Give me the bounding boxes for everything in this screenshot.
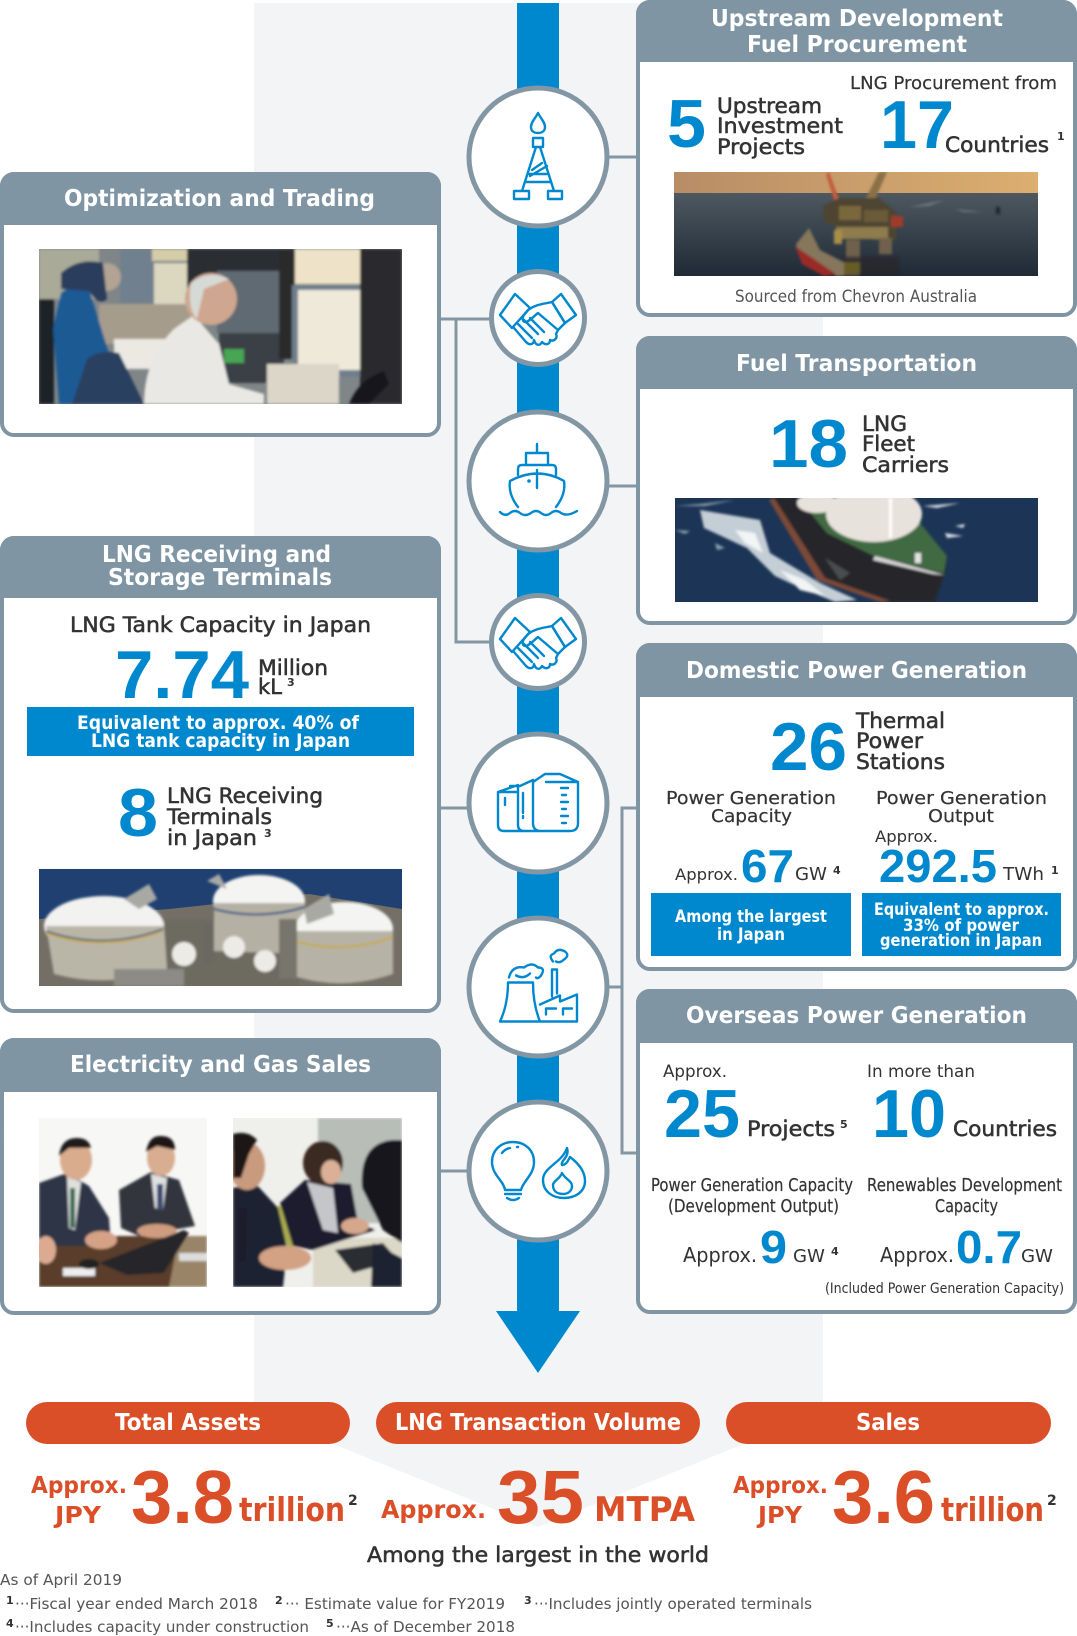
callout: 33 percent: Equivalent to approx. bbox=[874, 900, 1049, 920]
stat: capacity 9 GW: Power Generation Capacity bbox=[651, 1175, 853, 1196]
stat: capacity 67 GW bbox=[666, 788, 841, 892]
footnotes: ···As of December 2018 bbox=[336, 1618, 515, 1636]
footnotes: ···Includes capacity under construction bbox=[15, 1618, 309, 1636]
callout: 40 percent: LNG tank capacity in Japan bbox=[91, 730, 350, 752]
stat: 17 countries: LNG Procurement from bbox=[850, 73, 1057, 94]
stat: capacity 67 GW: GW bbox=[795, 864, 827, 885]
KPI: total assets: JPY bbox=[53, 1503, 101, 1529]
stat: output 292.5 TWh: TWh bbox=[1002, 864, 1044, 885]
photo: meeting with laptop bbox=[233, 1118, 402, 1287]
panel: overseas power generation bbox=[636, 989, 1077, 1312]
heading: fuel transportation: Fuel Transportation bbox=[736, 351, 977, 377]
footnotes: 4 bbox=[6, 1617, 14, 1630]
stat: capacity 9 GW: 4 bbox=[831, 1245, 839, 1258]
KPI: LNG transaction volume bbox=[376, 1402, 700, 1539]
footnotes: 2 bbox=[275, 1594, 283, 1607]
icon: handshake trading bbox=[492, 272, 584, 364]
footnotes: As of April 2019 bbox=[0, 1571, 122, 1589]
KPI: total assets: 2 bbox=[348, 1493, 358, 1509]
stat: capacity 67 GW: Approx. bbox=[675, 865, 738, 884]
stat: 25 projects: Approx. bbox=[663, 1062, 727, 1082]
KPI: LNG transaction volume: Approx. bbox=[381, 1495, 486, 1524]
KPI: total assets: trillion bbox=[239, 1490, 345, 1529]
heading: upstream: Fuel Procurement bbox=[747, 32, 967, 58]
stat: 26 thermal power stations: Thermal bbox=[855, 709, 945, 733]
callout: 40 percent: Equivalent to approx. 40% of bbox=[77, 712, 360, 734]
stat: 10 countries bbox=[867, 1062, 1057, 1152]
footnotes: 3 bbox=[524, 1594, 532, 1607]
KPI: total assets: 3.8 bbox=[131, 1455, 234, 1539]
caption: among the largest in the world: Among the largest in the world bbox=[367, 1543, 709, 1567]
panel: electricity and gas sales bbox=[0, 1038, 441, 1313]
stat: 5 upstream projects: Upstream bbox=[717, 94, 822, 118]
stat: output 292.5 TWh: 292.5 bbox=[879, 840, 997, 892]
KPI: total assets bbox=[26, 1402, 358, 1539]
stat: 26 thermal power stations: Stations bbox=[856, 750, 945, 774]
stat: tank capacity: 7.74 bbox=[115, 637, 249, 713]
icon: power plant bbox=[469, 918, 607, 1056]
stat: capacity 67 GW: 4 bbox=[833, 864, 841, 877]
icon: gas rig bbox=[469, 88, 607, 226]
connector lines bbox=[441, 157, 636, 1171]
stat: 26 thermal power stations: Power bbox=[856, 729, 923, 753]
footnotes: ···Fiscal year ended March 2018 bbox=[15, 1595, 258, 1613]
stat: 17 countries: 1 bbox=[1057, 130, 1065, 143]
stat: capacity 9 GW: 9 bbox=[760, 1221, 787, 1273]
stat: capacity 9 GW: (Development Output) bbox=[668, 1196, 839, 1217]
stat: 10 countries: Countries bbox=[953, 1117, 1057, 1141]
stat: 10 countries: 10 bbox=[872, 1076, 946, 1152]
stat: 18 LNG carriers bbox=[769, 406, 949, 482]
heading: upstream: Upstream Development bbox=[711, 6, 1003, 32]
callout: 33 percent bbox=[862, 893, 1061, 956]
stat: renewables 0.7 GW bbox=[825, 1175, 1064, 1297]
heading: sales: Electricity and Gas Sales bbox=[70, 1052, 371, 1078]
stat: output 292.5 TWh bbox=[875, 788, 1059, 892]
central flow arrow bbox=[496, 3, 580, 1373]
panel: domestic power generation bbox=[636, 643, 1077, 969]
stat: 8 terminals: Terminals bbox=[166, 805, 272, 829]
panel: optimization and trading bbox=[0, 172, 441, 435]
callout: among the largest bbox=[651, 893, 851, 956]
photo: LNG tanks bbox=[39, 869, 402, 986]
KPI: sales: Approx. bbox=[733, 1473, 828, 1499]
stat: capacity 67 GW: Power Generation bbox=[666, 788, 836, 809]
stat: 5 upstream projects bbox=[667, 86, 843, 162]
callout: 33 percent: 33% of power bbox=[903, 916, 1020, 936]
stat: capacity 9 GW: Approx. bbox=[683, 1243, 757, 1267]
icon: storage tanks bbox=[469, 734, 607, 872]
stat: 8 terminals: LNG Receiving bbox=[167, 784, 323, 808]
stat: output 292.5 TWh: 1 bbox=[1051, 864, 1059, 877]
stat: tank capacity: kL bbox=[258, 675, 282, 699]
photo: LNG carrier bbox=[675, 498, 1038, 602]
heading: overseas: Overseas Power Generation bbox=[686, 1003, 1027, 1029]
stat: renewables 0.7 GW: Capacity bbox=[935, 1196, 998, 1217]
stat: 8 terminals: in Japan bbox=[167, 826, 257, 850]
stat: 8 terminals bbox=[118, 775, 323, 851]
stat: 25 projects: Projects bbox=[747, 1117, 835, 1141]
KPI: sales bbox=[726, 1402, 1057, 1539]
icon: ship bbox=[469, 412, 607, 550]
stat: 18 LNG carriers: 18 bbox=[769, 406, 848, 482]
stat: 8 terminals: 8 bbox=[118, 775, 158, 851]
stat: 18 LNG carriers: Fleet bbox=[862, 432, 915, 456]
stat: capacity 9 GW: GW bbox=[793, 1246, 825, 1267]
stat: output 292.5 TWh: Approx. bbox=[875, 827, 938, 846]
photo: two men at table bbox=[39, 1118, 207, 1287]
stat: 5 upstream projects: Projects bbox=[717, 135, 805, 159]
stat: capacity 67 GW: Capacity bbox=[711, 806, 792, 827]
stat: capacity 9 GW bbox=[651, 1175, 853, 1273]
photo: trading floor bbox=[39, 249, 402, 404]
heading: optimization: Optimization and Trading bbox=[64, 186, 375, 212]
KPI: LNG transaction volume: MTPA bbox=[594, 1490, 696, 1530]
KPI: sales: 2 bbox=[1047, 1493, 1057, 1509]
footnotes: ··· Estimate value for FY2019 bbox=[285, 1595, 505, 1613]
footnotes: ···Includes jointly operated terminals bbox=[534, 1595, 812, 1613]
stat: 17 countries bbox=[850, 73, 1065, 163]
icon: light bulb and flame bbox=[469, 1102, 607, 1240]
stat: 17 countries: Countries bbox=[945, 133, 1049, 157]
photo: offshore platform bbox=[674, 172, 1038, 276]
KPI: sales: JPY bbox=[756, 1503, 802, 1529]
stat: renewables 0.7 GW: GW bbox=[1021, 1246, 1053, 1267]
KPI: sales: Sales bbox=[856, 1410, 920, 1436]
KPI: LNG transaction volume: 35 bbox=[497, 1455, 584, 1539]
icon: handshake terminals bbox=[492, 596, 584, 688]
callout: among the largest: in Japan bbox=[717, 925, 785, 945]
stat: 26 thermal power stations bbox=[770, 709, 945, 785]
panel: LNG receiving and storage terminals bbox=[0, 536, 441, 1011]
callout: 33 percent: generation in Japan bbox=[880, 931, 1042, 951]
stat: 18 LNG carriers: LNG bbox=[862, 412, 907, 436]
photo credit: Sourced from Chevron Australia bbox=[735, 287, 977, 307]
KPI: sales: 3.6 bbox=[832, 1455, 935, 1539]
footnotes bbox=[0, 1571, 812, 1636]
stat: 25 projects: 5 bbox=[840, 1118, 848, 1131]
stat: 5 upstream projects: Investment bbox=[717, 114, 843, 138]
stat: 17 countries: 17 bbox=[880, 87, 954, 163]
KPI: total assets: Total Assets bbox=[115, 1410, 261, 1436]
callout: 40 percent bbox=[27, 707, 414, 756]
stat: 18 LNG carriers: Carriers bbox=[862, 453, 949, 477]
stat: 5 upstream projects: 5 bbox=[667, 86, 706, 162]
heading: LNG terminals: Storage Terminals bbox=[108, 565, 332, 591]
heading: domestic: Domestic Power Generation bbox=[686, 658, 1027, 684]
stat: renewables 0.7 GW: Approx. bbox=[880, 1243, 954, 1267]
heading: upstream bbox=[711, 6, 1003, 58]
heading: LNG terminals bbox=[102, 542, 332, 591]
stat: tank capacity: 3 bbox=[287, 676, 295, 689]
stat: tank capacity bbox=[70, 613, 371, 713]
KPI: total assets: Approx. bbox=[31, 1473, 127, 1499]
callout: among the largest: Among the largest bbox=[675, 907, 827, 927]
stat: renewables 0.7 GW: 0.7 bbox=[956, 1221, 1022, 1273]
heading: LNG terminals: LNG Receiving and bbox=[102, 542, 331, 568]
panel: fuel transportation bbox=[636, 336, 1077, 623]
stat: 10 countries: In more than bbox=[867, 1062, 975, 1082]
stat: 8 terminals: 3 bbox=[264, 827, 272, 840]
stat: capacity 67 GW: 67 bbox=[741, 840, 794, 892]
stat: output 292.5 TWh: Output bbox=[928, 806, 994, 827]
stat: output 292.5 TWh: Power Generation bbox=[876, 788, 1047, 809]
stat: tank capacity: LNG Tank Capacity in Japan bbox=[70, 613, 371, 637]
stat: 26 thermal power stations: 26 bbox=[770, 709, 847, 785]
stat: 25 projects bbox=[663, 1062, 848, 1152]
panel: upstream development bbox=[636, 0, 1077, 315]
stat: 25 projects: 25 bbox=[664, 1076, 740, 1152]
background band with pointer bbox=[254, 3, 823, 1527]
footnotes: 1 bbox=[6, 1594, 14, 1607]
KPI: sales: trillion bbox=[941, 1490, 1044, 1529]
KPI: LNG transaction volume: LNG Transaction Volume bbox=[395, 1410, 681, 1436]
stat: tank capacity: Million bbox=[258, 656, 328, 680]
footnotes: 5 bbox=[326, 1617, 334, 1630]
